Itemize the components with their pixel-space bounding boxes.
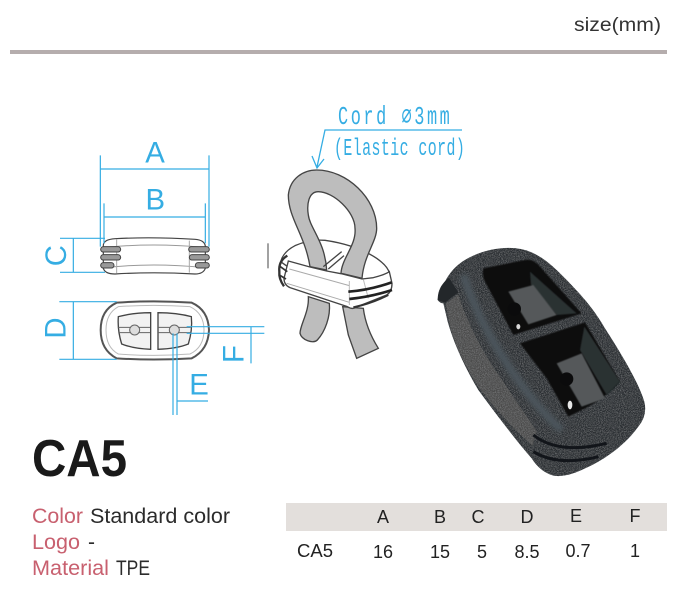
model title: CA5 (32, 430, 127, 488)
table values row: 1 (630, 541, 640, 561)
back of cord lock (281, 240, 389, 285)
callout text: elastic cord: (Elastic cord) (334, 135, 465, 162)
table header letters: C (472, 507, 484, 527)
lower cord ends (300, 297, 378, 358)
side view of cord lock (101, 238, 209, 274)
dimension B: B (146, 183, 165, 216)
dimension E (173, 333, 209, 415)
table values row: 0.7 (565, 541, 591, 561)
dimension C: C (40, 245, 73, 266)
lower opening (520, 322, 620, 417)
dimension D (39, 302, 117, 359)
attribute: logo: Logo (32, 531, 80, 554)
cord loop (288, 170, 377, 278)
table values row: 15 (430, 542, 450, 562)
dimension B (104, 183, 205, 243)
table header letters: F (630, 506, 640, 526)
tick mark (266, 243, 269, 268)
photo body (438, 248, 645, 476)
ribbed end (533, 435, 607, 461)
table header letters: B (434, 507, 446, 527)
attribute: material: TPE (116, 557, 150, 580)
cross bar of cord lock (323, 252, 344, 269)
cord lock body (279, 256, 392, 308)
table values row (297, 541, 640, 562)
table values row: CA5 (297, 541, 333, 561)
end tab (438, 278, 458, 303)
dimension D: D (39, 317, 72, 339)
top view of cord lock (101, 301, 209, 359)
cord specification callout (312, 103, 465, 168)
cord threading illustration (268, 170, 392, 358)
dimension A: A (145, 136, 165, 169)
dimension C (40, 238, 105, 272)
attribute: color: Standard color (90, 505, 230, 528)
unit label: size(mm): size(mm) (574, 15, 661, 36)
attribute: color (32, 505, 230, 528)
dimension A (100, 136, 209, 247)
table header letters: E (570, 506, 582, 526)
callout text: cord diameter: Cord ⌀3mm (338, 103, 450, 132)
upper opening (483, 260, 582, 335)
product photo of cord lock (438, 248, 645, 476)
table header letters: D (520, 507, 534, 527)
product attributes (32, 505, 230, 580)
attribute: material (32, 557, 150, 580)
dimension F (187, 327, 264, 363)
dimension E: E (189, 369, 209, 402)
table header band (286, 503, 667, 531)
size table (286, 503, 667, 562)
table header letters: A (377, 507, 389, 527)
table values row: 8.5 (514, 542, 540, 562)
side wall (446, 294, 537, 446)
callout leader arrow (312, 130, 462, 168)
table header letters (377, 506, 640, 527)
table values row: 16 (373, 542, 393, 562)
header rule (10, 50, 667, 54)
attribute: logo: - (88, 531, 95, 554)
dimension F: F (218, 345, 251, 363)
dimension drawing (39, 136, 264, 415)
attribute: color: Color (32, 505, 83, 528)
rim highlight (463, 275, 562, 430)
table values row: 5 (477, 542, 487, 562)
attribute: material: Material (32, 557, 109, 580)
